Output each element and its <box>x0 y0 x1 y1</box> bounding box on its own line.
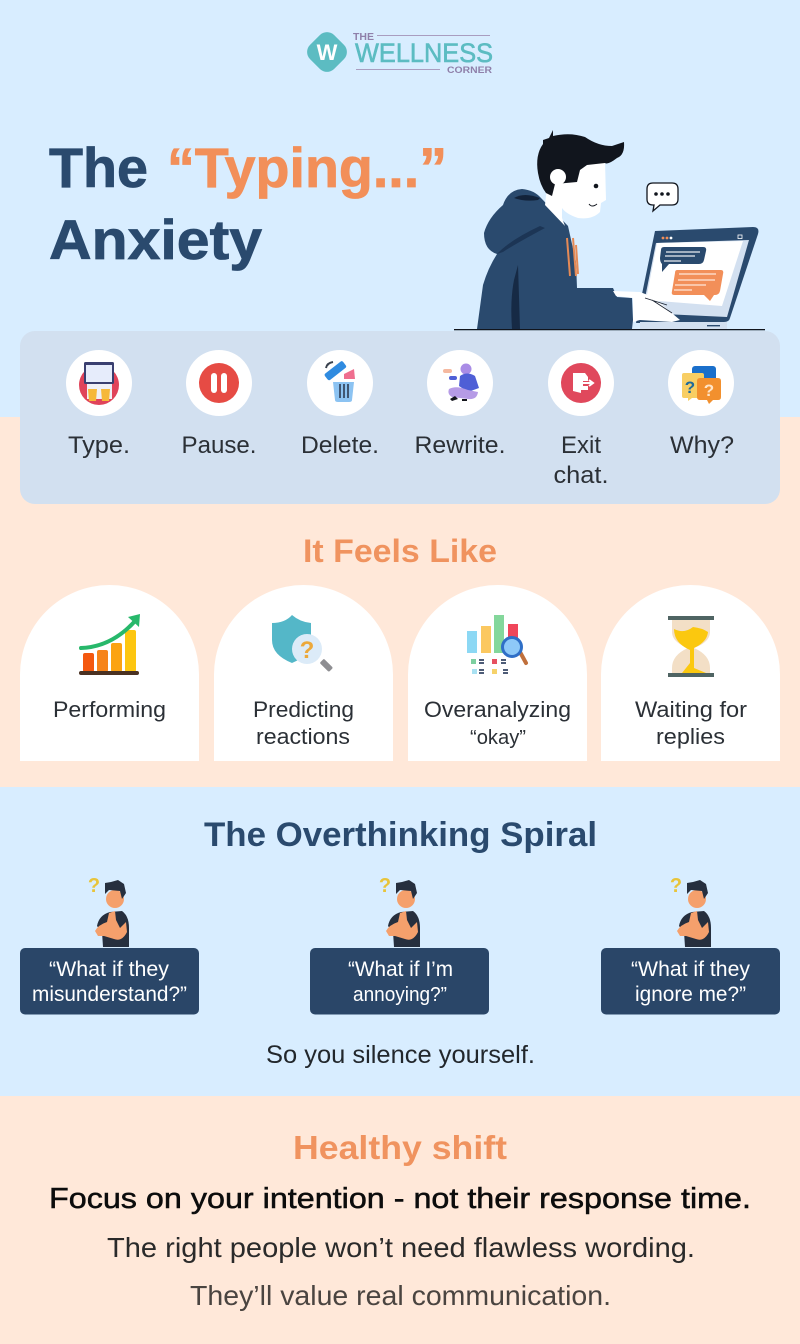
icon: thinking man: ? <box>88 875 100 897</box>
thought: What if they ignore me: “What if they <box>631 958 750 981</box>
card: Waiting for replies: Waiting for <box>635 697 747 722</box>
card: Waiting for replies <box>601 585 780 761</box>
item: Pause <box>182 350 256 459</box>
item: Why: Why? <box>670 432 734 459</box>
card: Overanalyzing okay: Overanalyzing <box>424 697 571 722</box>
speech bubble <box>647 183 678 211</box>
hands <box>613 291 680 322</box>
item: Rewrite: Rewrite. <box>414 432 506 459</box>
title <box>49 136 447 271</box>
thought: What if they ignore me <box>601 875 780 1014</box>
desk line <box>454 329 765 330</box>
item: Why <box>668 350 734 459</box>
icon: growth chart <box>79 614 140 675</box>
panel: chat behaviours <box>20 331 780 504</box>
card: Predicting reactions: reactions <box>256 724 350 749</box>
icon: thinking man: ? <box>379 875 391 897</box>
title: “Typing...” <box>167 136 447 199</box>
icon: thinking man <box>379 875 420 947</box>
logo: The Wellness Corner: THE <box>353 32 374 43</box>
logo: The Wellness Corner <box>303 28 493 76</box>
icon: thinking man <box>670 875 711 947</box>
item: Type <box>66 350 132 459</box>
laptop <box>636 227 758 330</box>
text: The right people: The right people won’t need flawless wording. <box>107 1232 695 1263</box>
icon: shield and magnifier: ? <box>300 637 314 664</box>
thought: What if they misunderstand <box>20 875 199 1014</box>
head <box>545 161 606 226</box>
card: Predicting reactions: Predicting <box>253 697 354 722</box>
icon: shield and magnifier <box>272 615 333 672</box>
heading: Healthy shift: Healthy shift <box>293 1129 507 1166</box>
item: Why: ? <box>685 378 695 397</box>
icon: data chart and magnifier <box>467 615 526 674</box>
item: Delete <box>301 350 379 459</box>
logo: The Wellness Corner: W <box>317 40 338 65</box>
item: Exit chat: chat. <box>554 462 608 489</box>
thought: What if they ignore me: ignore me?” <box>635 983 746 1006</box>
card: Overanalyzing okay <box>408 585 587 761</box>
illustration: person typing on laptop <box>454 130 765 330</box>
item: Exit chat <box>548 350 614 489</box>
thought: What if they misunderstand: “What if they <box>49 958 170 981</box>
card: Performing <box>20 585 199 761</box>
hair <box>537 130 624 196</box>
icon: thinking man <box>88 875 129 947</box>
icon: thinking man: ? <box>670 875 682 897</box>
text: Focus on your intention: Focus on your intention - not their response time. <box>49 1183 751 1215</box>
title: Anxiety <box>49 208 262 271</box>
thought: What if I'm annoying: “What if I’m <box>348 958 453 981</box>
logo: The Wellness Corner: WELLNESS <box>355 38 493 68</box>
item: Why: ? <box>704 381 714 400</box>
text: They'll value real communication: They’ll value real communication. <box>190 1280 611 1311</box>
item: Type: Type. <box>68 432 130 459</box>
thought: What if I'm annoying <box>310 875 489 1014</box>
text: So you silence yourself: So you silence yourself. <box>266 1041 535 1069</box>
icon: hourglass <box>668 616 714 677</box>
item: Delete: Delete. <box>301 432 379 459</box>
card: Predicting reactions <box>214 585 393 761</box>
item: Rewrite <box>414 350 506 459</box>
title: The <box>49 136 148 199</box>
card: Overanalyzing okay: “okay” <box>470 727 526 749</box>
hoodie <box>477 189 633 329</box>
thought: What if they misunderstand: misunderstand?” <box>32 983 187 1006</box>
card: Waiting for replies: replies <box>656 724 725 749</box>
item: Pause: Pause. <box>182 432 256 459</box>
heading: The Overthinking Spiral: The Overthinking Spiral <box>204 816 597 854</box>
logo: The Wellness Corner: CORNER <box>447 65 492 76</box>
item: Exit chat: Exit <box>561 432 601 459</box>
heading: It Feels Like: It Feels Like <box>303 533 497 569</box>
thought: What if I'm annoying: annoying?” <box>353 984 447 1006</box>
card: Performing: Performing <box>53 697 166 722</box>
